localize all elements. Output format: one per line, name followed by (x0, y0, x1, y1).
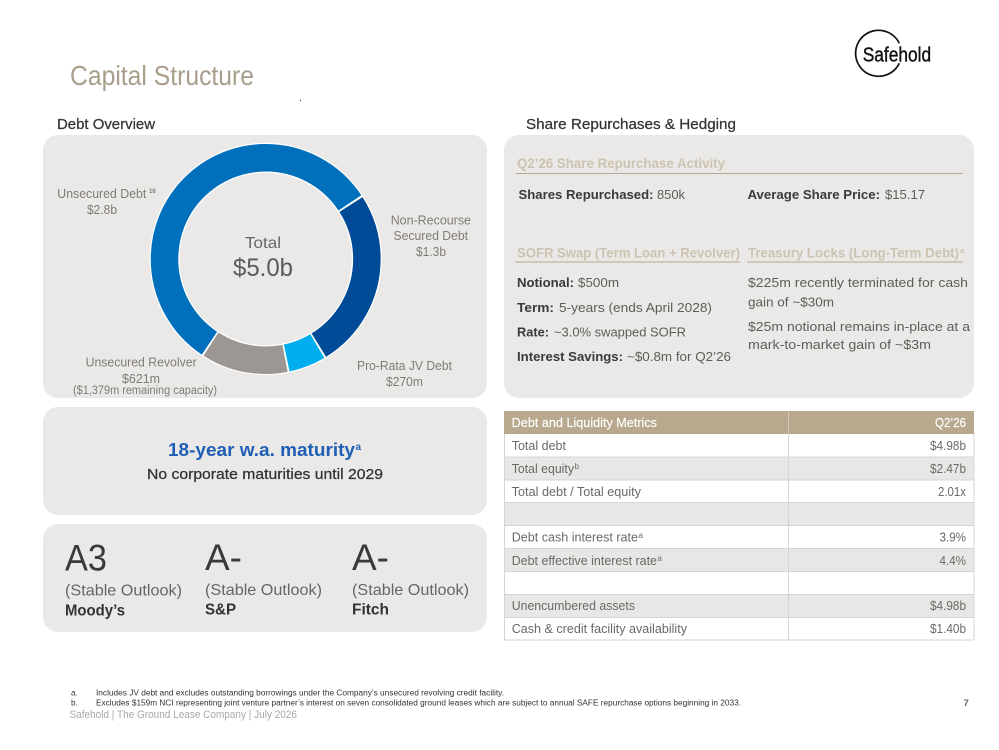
section: repurchase activity: Average Share Price: (748, 187, 880, 202)
table row: total debt: Total debt (512, 439, 566, 453)
section: treasury locks: $225m recently terminated for cash (748, 275, 968, 290)
donut chart (165, 158, 367, 360)
table row: cash interest rate: 3.9% (940, 531, 966, 545)
table row: cash and credit availability: Cash & credit facility availability (512, 622, 688, 636)
table row: effective interest rate: 4.4% (940, 554, 966, 568)
section: repurchase activity: Q2’26 Share Repurchase Activity (517, 155, 725, 171)
table row: total equity (512, 462, 966, 476)
section: treasury locks: gain of ~$30m (748, 295, 834, 310)
heading: Share Repurchases & Hedging: Share Repurchases & Hedging (526, 116, 736, 133)
section: treasury locks: mark-to-market gain of ~$3m (748, 337, 931, 352)
table row: debt to equity: 2.01x (938, 485, 967, 499)
rating: Fitch: Fitch (352, 602, 389, 618)
logo: Safehold: Safehold (863, 44, 931, 66)
section: SOFR swap: Rate: (517, 325, 549, 340)
table header: Debt and Liquidity Metrics (512, 416, 657, 430)
section: SOFR swap: 5-years (ends April 2028) (559, 300, 712, 315)
rating: S&P: A- (205, 537, 242, 578)
section: treasury locks: a (960, 246, 965, 255)
donut center total: Total (245, 235, 281, 252)
rating: Fitch: (Stable Outlook) (352, 582, 469, 599)
footnotes (71, 688, 741, 708)
table row: total debt (512, 439, 966, 453)
table row: effective interest rate (512, 554, 966, 568)
rating: Moody's: Moody’s (65, 603, 125, 620)
section: repurchase activity (516, 155, 963, 202)
rating: S&P: S&P (205, 602, 236, 618)
panel: credit ratings (43, 524, 487, 632)
rating: Fitch: A- (352, 537, 389, 578)
table row: cash interest rate: a (638, 531, 644, 540)
footnotes: Excludes $159m NCI representing joint venture partner’s interest on seven consolidated ground leases which are subject to annual SAFE repurchase options beginning in 2033. (96, 698, 741, 708)
footer: Safehold | The Ground Lease Company | July 2026 (70, 709, 297, 721)
section: SOFR swap: SOFR Swap (Term Loan + Revolver) (517, 244, 740, 260)
label: unsecured debt: 16 (149, 189, 156, 195)
section: SOFR swap: ~$0.8m for Q2’26 (627, 349, 731, 364)
donut center total (233, 235, 293, 282)
section: SOFR swap: Term: (517, 300, 554, 315)
label: pro-rata JV debt: $270m (386, 375, 423, 389)
panel: maturity callout: 18-year w.a. maturity (168, 439, 356, 460)
table row: cash interest rate (512, 531, 966, 545)
label: non-recourse secured debt: Non-Recourse (391, 214, 471, 228)
section: SOFR swap (515, 244, 740, 364)
table row: unencumbered assets (512, 599, 966, 613)
section: treasury locks (747, 244, 971, 352)
rating: Fitch (352, 537, 469, 618)
section: repurchase activity: Shares Repurchased: (518, 187, 654, 202)
label: non-recourse secured debt: $1.3b (416, 245, 446, 259)
table row: total equity: Total equity (512, 462, 575, 476)
table row: debt to equity (512, 485, 967, 499)
label: unsecured revolver: Unsecured Revolver (86, 356, 197, 370)
table header (504, 411, 974, 434)
table row: total equity: b (574, 462, 580, 471)
section: treasury locks: $25m notional remains in-place at a (748, 319, 971, 334)
panel: maturity callout (43, 407, 487, 515)
rating: S&P: (Stable Outlook) (205, 582, 322, 599)
title: Capital Structure (70, 60, 254, 91)
panel: maturity callout: a (356, 442, 362, 453)
footnotes: a. (71, 688, 78, 698)
table row: cash and credit availability (512, 622, 966, 636)
section: SOFR swap: Notional: (517, 275, 574, 290)
label: unsecured debt: Unsecured Debt (57, 187, 147, 201)
section: treasury locks: Treasury Locks (Long-Term Debt) (748, 244, 959, 260)
rating: Moody's: A3 (65, 538, 107, 579)
table row: cash and credit availability: $1.40b (930, 622, 966, 636)
heading: Debt Overview: Debt Overview (57, 116, 155, 133)
table header: Q2’26 (935, 416, 966, 430)
label: unsecured debt (57, 187, 156, 217)
table row: effective interest rate: a (658, 554, 662, 563)
label: unsecured debt: $2.8b (87, 203, 117, 217)
footnotes: Includes JV debt and excludes outstanding borrowings under the Company’s unsecured revolving credit facility. (96, 688, 504, 698)
label: pro-rata JV debt: Pro-Rata JV Debt (357, 359, 452, 373)
label: unsecured revolver: ($1,379m remaining capacity) (73, 385, 217, 397)
label: unsecured revolver (73, 356, 217, 397)
section: SOFR swap: Interest Savings: (517, 349, 623, 364)
table row: total equity: $2.47b (930, 462, 966, 476)
donut center total: $5.0b (233, 254, 293, 282)
footnotes: b. (71, 698, 78, 708)
table row: unencumbered assets: $4.98b (930, 599, 966, 613)
label: non-recourse secured debt: Secured Debt (394, 229, 469, 243)
section: SOFR swap: $500m (578, 275, 619, 290)
logo: Safehold (856, 30, 931, 76)
page number: 7 (964, 698, 969, 709)
panel: debt overview (43, 135, 487, 398)
rating: Moody's: (Stable Outlook) (65, 583, 182, 600)
table row: debt to equity: Total debt / Total equity (512, 485, 642, 499)
section: repurchase activity: 850k (657, 187, 685, 202)
label: unsecured revolver: $621m (122, 372, 160, 386)
label: pro-rata JV debt (357, 359, 452, 389)
section: repurchase activity: $15.17 (885, 187, 925, 202)
table row: unencumbered assets: Unencumbered assets (512, 599, 635, 613)
panel: maturity callout: No corporate maturities until 2029 (147, 467, 383, 483)
rating: Moody's (65, 538, 182, 620)
table row: effective interest rate: Debt effective interest rate (512, 554, 657, 568)
panel: share repurchases and hedging (504, 135, 974, 398)
table row: cash interest rate: Debt cash interest rate (512, 531, 638, 545)
section: SOFR swap: ~3.0% swapped SOFR (554, 325, 686, 340)
rating: S&P (205, 537, 322, 618)
label: non-recourse secured debt (391, 214, 471, 259)
table: debt and liquidity metrics (504, 411, 974, 640)
table row: total debt: $4.98b (930, 439, 966, 453)
